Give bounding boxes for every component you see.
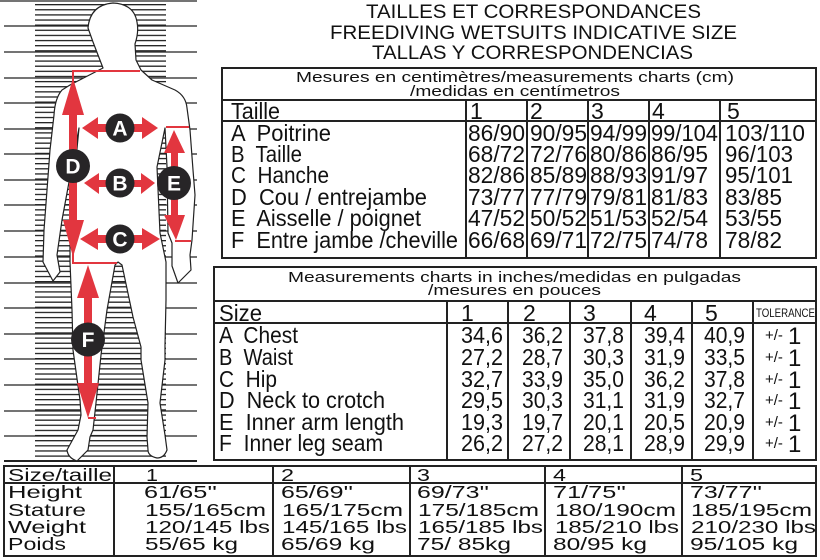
size 4 column: 4 xyxy=(553,465,566,485)
inch values: 34,6 xyxy=(461,322,503,348)
centimetre values: 53/55 xyxy=(725,205,782,231)
size 1 column xyxy=(144,465,270,554)
row labels: Stature xyxy=(8,500,86,520)
height ruler stripes xyxy=(0,1,197,462)
measurement labels: D Neck to crotch xyxy=(219,387,385,413)
centimetre values: 68/72 xyxy=(468,141,525,167)
inch values: 37,8 xyxy=(704,366,745,392)
size 3 column xyxy=(417,465,543,554)
measurement labels xyxy=(231,120,458,253)
measurement labels: B Taille xyxy=(231,141,302,167)
inch values: 28,9 xyxy=(644,430,685,456)
size 5 column: 5 xyxy=(690,465,703,485)
size 3 column: 165/185 lbs xyxy=(418,517,543,537)
centimetre values: 90/95 xyxy=(530,120,587,146)
measurement labels: B Waist xyxy=(219,344,294,370)
title: TAILLES ET CORRESPONDANCES xyxy=(366,2,701,23)
size header row: 1 xyxy=(461,300,474,326)
size 5 column: 210/230 lbs xyxy=(691,517,816,537)
centimetre values xyxy=(468,120,805,253)
inch values: 36,2 xyxy=(522,322,563,348)
measurement labels: E Inner arm length xyxy=(219,409,404,435)
panel: height and weight table xyxy=(4,465,816,556)
centimetre values: 99/104 xyxy=(651,120,718,146)
table grid xyxy=(4,466,816,556)
tolerance values: +/- xyxy=(765,392,783,409)
centimetre values: 81/83 xyxy=(651,184,708,210)
badge D xyxy=(56,149,90,183)
row labels xyxy=(8,465,112,554)
row labels: Poids xyxy=(8,534,66,554)
size 4 column: 180/190cm xyxy=(555,500,676,520)
size 5 column: 95/105 kg xyxy=(690,534,798,554)
centimetre values: 72/76 xyxy=(530,141,587,167)
inch values: 20,1 xyxy=(583,409,624,435)
size 1 column: 61/65'' xyxy=(144,482,217,502)
inch values: 31,9 xyxy=(644,344,685,370)
inch values: 27,2 xyxy=(461,344,503,370)
inch values: 36,2 xyxy=(644,366,685,392)
size 4 column: 71/75'' xyxy=(553,482,626,502)
arrow D xyxy=(62,78,84,257)
badge E: E xyxy=(167,172,181,196)
inch values: 20,9 xyxy=(704,409,745,435)
measurement labels xyxy=(219,322,404,456)
size 2 column: 65/69 kg xyxy=(281,534,375,554)
centimetre values: 47/52 xyxy=(468,205,525,231)
size 2 column: 65/69'' xyxy=(281,482,353,502)
tolerance values: 1 xyxy=(788,345,801,372)
size 1 column: 120/145 lbs xyxy=(145,517,270,537)
title: FREEDIVING WETSUITS INDICATIVE SIZE xyxy=(330,23,737,44)
size header row: 3 xyxy=(583,300,596,326)
tolerance values: 1 xyxy=(788,388,801,415)
size 4 column: 185/210 lbs xyxy=(555,517,679,537)
size 3 column: 175/185cm xyxy=(418,500,539,520)
measurement labels: C Hip xyxy=(219,366,277,392)
badge F xyxy=(71,322,105,356)
size 4 column: 80/95 kg xyxy=(553,534,647,554)
inch values: 32,7 xyxy=(461,366,503,392)
inch values: 40,9 xyxy=(704,322,745,348)
centimetre values: 79/81 xyxy=(590,184,647,210)
centimetre values: 50/52 xyxy=(530,205,587,231)
measurement labels: A Poitrine xyxy=(231,120,331,146)
size header row: 3 xyxy=(591,98,604,124)
measurement labels: A Chest xyxy=(219,322,299,348)
centimetre values: 52/54 xyxy=(651,205,708,231)
table grid xyxy=(222,68,816,258)
size 1 column: 1 xyxy=(146,465,158,485)
tolerance values: 1 xyxy=(788,367,801,394)
badge A xyxy=(106,114,134,142)
arrow E xyxy=(164,130,185,240)
table heading: /medidas en centímetros xyxy=(410,83,620,100)
size header row: 2 xyxy=(530,98,543,124)
row labels: Weight xyxy=(8,517,86,537)
row labels: Size/taille xyxy=(8,465,112,485)
badge D: D xyxy=(65,156,81,178)
inch values: 19,3 xyxy=(461,409,503,435)
size 5 column: 73/77'' xyxy=(690,482,762,502)
body outline xyxy=(43,3,195,461)
size 4 column xyxy=(553,465,679,554)
centimetre values: 91/97 xyxy=(651,162,708,188)
badge C xyxy=(106,224,134,254)
measurement bracket lines xyxy=(73,71,191,418)
tolerance values: +/- xyxy=(765,327,783,344)
table heading xyxy=(296,69,734,100)
centimetre values: 96/103 xyxy=(725,141,793,167)
centimetre values: 80/86 xyxy=(590,141,647,167)
inch values: 29,9 xyxy=(704,430,745,456)
inch values: 33,9 xyxy=(522,366,563,392)
inch values: 30,3 xyxy=(522,387,563,413)
size header row xyxy=(231,98,740,124)
centimetre values: 72/75 xyxy=(590,227,647,253)
centimetre values: 85/89 xyxy=(530,162,587,188)
centimetre values: 78/82 xyxy=(725,227,782,253)
centimetre values: 86/95 xyxy=(651,141,708,167)
badge E xyxy=(157,166,191,200)
centimetre values: 73/77 xyxy=(468,184,525,210)
tolerance values xyxy=(765,323,801,458)
size 3 column: 3 xyxy=(417,465,430,485)
size header row: 4 xyxy=(644,300,657,326)
centimetre values: 86/90 xyxy=(468,120,525,146)
badge A: A xyxy=(112,118,128,140)
tolerance values: +/- xyxy=(765,371,783,388)
size header row: Taille xyxy=(231,98,280,124)
arrow B xyxy=(84,173,155,194)
centimetre values: 82/86 xyxy=(468,162,525,188)
tolerance values: 1 xyxy=(788,410,801,437)
tolerance values: +/- xyxy=(765,435,783,452)
inch values: 29,5 xyxy=(461,387,503,413)
size 1 column: 55/65 kg xyxy=(145,534,238,554)
tolerance values: 1 xyxy=(788,323,801,350)
panel: centimetre table xyxy=(222,68,816,258)
size 2 column: 145/165 lbs xyxy=(282,517,407,537)
centimetre values: 66/68 xyxy=(468,227,525,253)
centimetre values: 94/99 xyxy=(590,120,647,146)
body silhouette with measurement markers xyxy=(43,3,195,461)
centimetre values: 77/79 xyxy=(530,184,587,210)
inch values: 39,4 xyxy=(644,322,685,348)
inch values: 33,5 xyxy=(704,344,745,370)
table heading: /mesures en pouces xyxy=(428,282,601,299)
centimetre values: 88/93 xyxy=(590,162,647,188)
centimetre values: 95/101 xyxy=(725,162,793,188)
panel: inches table xyxy=(214,267,816,460)
row labels: Height xyxy=(8,482,82,502)
size 3 column: 75/ 85kg xyxy=(417,534,511,554)
size header row xyxy=(219,300,718,326)
size header row: 1 xyxy=(470,98,483,124)
measurement labels: F Entre jambe /cheville xyxy=(231,227,458,253)
measurement labels: C Hanche xyxy=(231,162,329,188)
tolerance values: +/- xyxy=(765,349,783,366)
table heading: Measurements charts in inches/medidas en pulgadas xyxy=(288,269,741,286)
inch values: 30,3 xyxy=(583,344,624,370)
arrow C xyxy=(80,228,160,250)
table heading xyxy=(288,269,741,299)
inch values: 31,1 xyxy=(583,387,624,413)
tolerance values: 1 xyxy=(788,431,801,458)
size header row: 5 xyxy=(705,300,718,326)
centimetre values: 51/53 xyxy=(590,205,647,231)
size 2 column: 2 xyxy=(281,465,294,485)
inch values: 28,1 xyxy=(583,430,624,456)
measurement labels: E Aisselle / poignet xyxy=(231,205,422,231)
inch values: 20,5 xyxy=(644,409,685,435)
inch values: 19,7 xyxy=(522,409,563,435)
inch values: 37,8 xyxy=(583,322,624,348)
size header row: 2 xyxy=(523,300,536,326)
title: TALLAS Y CORRESPONDENCIAS xyxy=(372,43,693,64)
arrow F xyxy=(77,265,99,418)
badge B: B xyxy=(112,172,128,196)
tolerance values: +/- xyxy=(765,414,783,431)
inch values: 28,7 xyxy=(522,344,563,370)
inch values: 26,2 xyxy=(461,430,503,456)
size header row: 4 xyxy=(652,98,665,124)
centimetre values: 103/110 xyxy=(725,120,805,146)
inch values: 32,7 xyxy=(704,387,745,413)
size 5 column xyxy=(690,465,816,554)
size 2 column xyxy=(281,465,407,554)
centimetre values: 74/78 xyxy=(651,227,708,253)
centimetre values: 83/85 xyxy=(725,184,782,210)
badge F: F xyxy=(82,329,95,352)
size header row: 5 xyxy=(727,98,740,124)
size 3 column: 69/73'' xyxy=(417,482,489,502)
table grid xyxy=(214,267,816,460)
size 1 column: 155/165cm xyxy=(145,500,266,520)
inch values: 35,0 xyxy=(583,366,624,392)
inch values: 31,9 xyxy=(644,387,685,413)
inch values xyxy=(461,322,745,456)
table heading: Mesures en centimètres/measurements charts (cm) xyxy=(296,69,734,86)
arrow A xyxy=(82,117,158,139)
inch values: 27,2 xyxy=(522,430,563,456)
badge B xyxy=(106,168,134,198)
centimetre values: 69/71 xyxy=(530,227,587,253)
measurement labels: D Cou / entrejambe xyxy=(231,184,427,210)
size 2 column: 165/175cm xyxy=(282,500,403,520)
size header row: Size xyxy=(219,300,262,326)
badge C: C xyxy=(112,228,128,252)
measurement labels: F Inner leg seam xyxy=(219,430,383,456)
title xyxy=(330,2,737,64)
size 5 column: 185/195cm xyxy=(691,500,812,520)
